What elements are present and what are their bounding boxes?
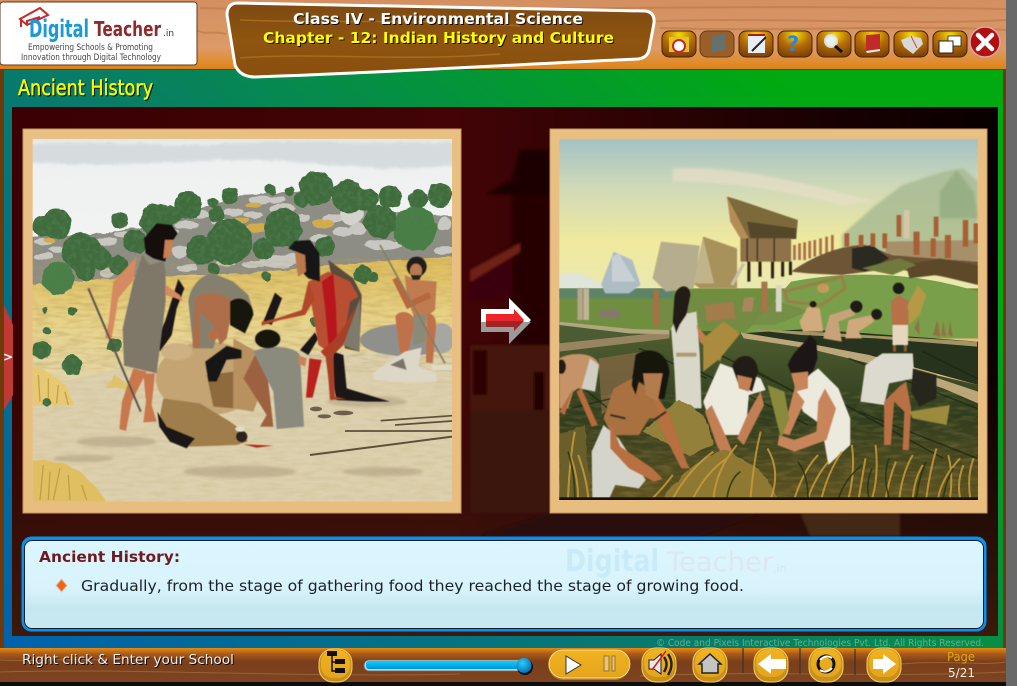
scene: villagers harvesting rice bbox=[557, 139, 978, 505]
icon: window resize bbox=[933, 31, 967, 57]
body text: Gradually, from the stage of gathering food they reached the stage of growing food. bbox=[81, 577, 744, 595]
logo card: Empowering Schools & Promoting bbox=[28, 43, 153, 53]
standing woman with sheaf bbox=[671, 286, 740, 408]
grass tufts bbox=[32, 366, 128, 502]
spears on the ground bbox=[310, 416, 452, 455]
middle woman harvesting bbox=[703, 356, 766, 467]
toolbar icons bbox=[662, 27, 1000, 57]
watermark logo: .in bbox=[773, 562, 787, 575]
icon: magnifier bbox=[817, 31, 851, 57]
horse bbox=[155, 279, 390, 448]
panel heading: Ancient History: Ancient History bbox=[18, 76, 153, 100]
top wooden header bar bbox=[0, 0, 1006, 69]
page counter: Page bbox=[947, 650, 975, 664]
bottom wooden control bar bbox=[0, 648, 1006, 686]
title plate: Chapter - 12: Indian History and Culture bbox=[263, 29, 614, 47]
icon: graduation cap bbox=[20, 8, 48, 27]
text panel bbox=[22, 536, 986, 632]
logo card: Teacher bbox=[94, 17, 161, 41]
golden rice foreground bbox=[664, 450, 778, 498]
seated man at right bbox=[360, 245, 455, 382]
button: contents tree bbox=[319, 649, 352, 682]
icon: close bbox=[970, 27, 1000, 57]
page counter: 5/21 bbox=[948, 666, 975, 680]
bullet icon bbox=[56, 579, 67, 592]
logo card: .in bbox=[163, 29, 174, 39]
divider bbox=[743, 648, 855, 675]
progress slider bbox=[364, 658, 533, 675]
red transition arrow bbox=[481, 298, 531, 344]
crouching gatherer bbox=[188, 273, 253, 348]
shrubs and trees bbox=[32, 171, 452, 407]
man in foreground cutting rice bbox=[592, 350, 690, 500]
button: refresh bbox=[809, 648, 843, 682]
icon: help: ? bbox=[787, 32, 799, 56]
scene: hunters butchering a horse bbox=[32, 139, 452, 502]
woman with staff bbox=[88, 223, 183, 431]
side tab bbox=[3, 305, 13, 410]
watermark logo: Teacher bbox=[666, 547, 774, 578]
kneeling person in grey bbox=[243, 330, 307, 429]
wooden frame right bbox=[550, 129, 987, 513]
left picture: gathering food bbox=[20, 125, 467, 515]
right bending harvester bbox=[860, 353, 950, 450]
play and pause pill bbox=[548, 649, 630, 680]
icon: help bbox=[778, 31, 812, 57]
right picture: growing food bbox=[550, 129, 987, 513]
right woman harvesting bbox=[767, 335, 850, 465]
wooden frame left bbox=[23, 129, 461, 513]
button: next bbox=[867, 648, 901, 682]
title plate: Class IV - Environmental Science bbox=[293, 10, 583, 28]
palisade and work hill bbox=[791, 235, 978, 285]
icon: notepad bbox=[739, 31, 773, 57]
watermark logo: Digital bbox=[565, 544, 659, 579]
button: home bbox=[693, 648, 727, 682]
man with red painted body bbox=[262, 240, 362, 400]
title plate bbox=[227, 3, 654, 77]
horse skull and bones bbox=[373, 348, 437, 382]
page counter bbox=[947, 650, 975, 680]
watermark logo bbox=[565, 544, 787, 579]
dark red content background bbox=[12, 107, 998, 636]
icon: play bbox=[566, 656, 581, 674]
man harvesting at left edge bbox=[557, 354, 599, 427]
golden rice behind workers bbox=[559, 398, 713, 505]
icon: open book bbox=[894, 31, 928, 57]
icon: pause bbox=[604, 656, 615, 671]
button: previous bbox=[754, 648, 788, 682]
footer school text: Right click & Enter your School bbox=[22, 653, 234, 668]
copyright note: © Code and Pixels Interactive Technologies Pvt. Ltd. All Rights Reserved. bbox=[656, 638, 984, 649]
back row of harvesters bbox=[800, 283, 953, 352]
distant figures bbox=[577, 277, 845, 327]
icon: dictionary bbox=[855, 31, 889, 57]
icon: reference book bbox=[700, 31, 734, 57]
button: mute sound bbox=[642, 648, 676, 682]
logo card bbox=[0, 2, 197, 65]
side tab: > bbox=[3, 350, 13, 364]
logo card: Innovation through Digital Technology bbox=[21, 53, 161, 63]
huts bbox=[601, 197, 798, 293]
icon: timer folder bbox=[662, 31, 696, 57]
panel subheading: Ancient History: bbox=[39, 548, 180, 566]
logo card: Digital bbox=[29, 15, 89, 43]
rice field and paths bbox=[559, 330, 978, 500]
